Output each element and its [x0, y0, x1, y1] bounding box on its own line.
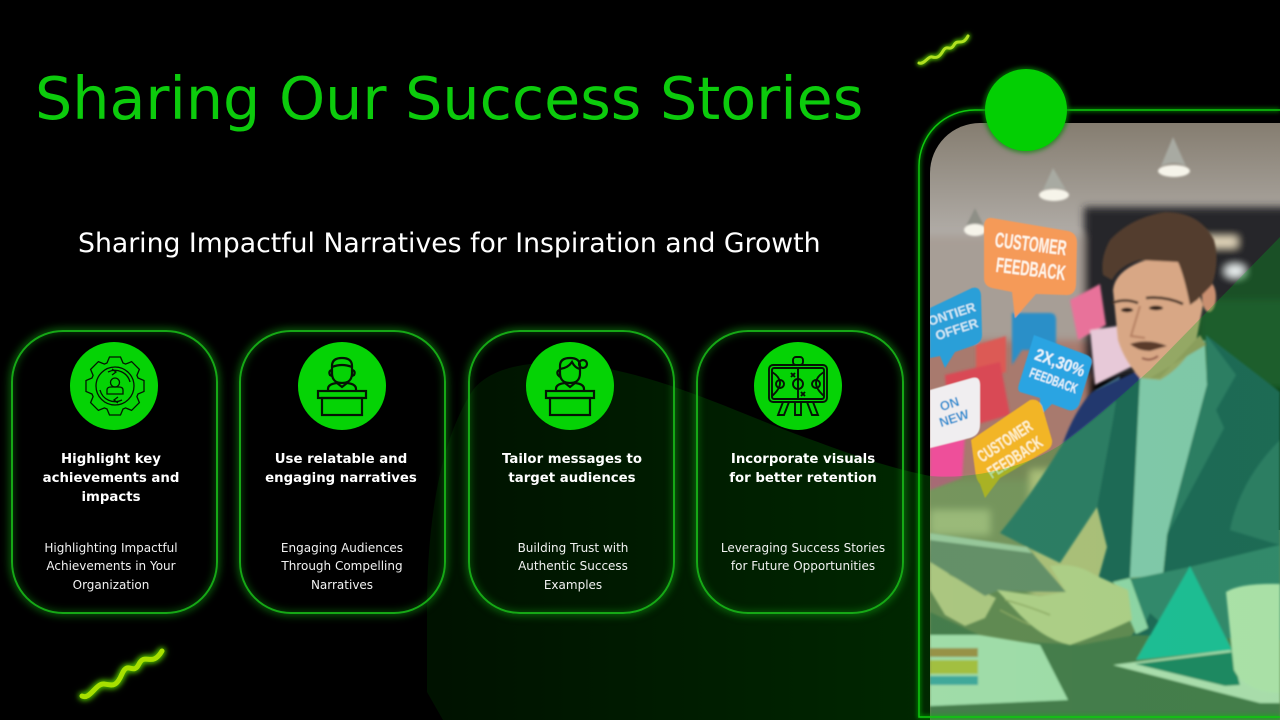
description: Examples	[544, 578, 602, 592]
man	[1000, 212, 1280, 640]
heading	[729, 452, 877, 486]
card outline	[696, 330, 904, 614]
heading: Highlight key	[61, 452, 161, 467]
description: Narratives	[311, 578, 373, 592]
icon: male speaker at podium	[298, 342, 386, 430]
panel: incorporate visuals	[689, 323, 911, 620]
panel: relatable narratives	[232, 323, 453, 621]
description: Highlighting Impactful	[44, 541, 178, 555]
feedback speech bubbles: FEEDBACK	[995, 254, 1067, 285]
description: Leveraging Success Stories	[721, 541, 885, 555]
accent green circle	[985, 69, 1067, 151]
top squiggle accent	[914, 30, 974, 69]
table with paper, triangle, tablet and cup	[930, 566, 1280, 720]
heading: engaging narratives	[265, 471, 417, 486]
description	[281, 541, 403, 592]
heading: Incorporate visuals	[731, 452, 875, 467]
description: Building Trust with	[518, 541, 628, 555]
card outline	[11, 330, 218, 614]
title: Sharing Our Success Stories	[35, 65, 863, 133]
feedback speech bubbles: CUSTOMER	[974, 417, 1036, 466]
heading	[502, 452, 642, 486]
heading: impacts	[81, 490, 141, 505]
ceiling lamps	[964, 137, 1190, 236]
hands holding tablet	[930, 533, 1132, 645]
description: Achievements in Your	[46, 559, 176, 573]
feedback speech bubbles: FEEDBACK	[1027, 364, 1080, 396]
card outline	[468, 330, 675, 614]
heading: target audiences	[508, 471, 636, 486]
icon: female speaker at podium	[526, 342, 614, 430]
feedback speech bubbles: FEEDBACK	[984, 432, 1047, 482]
heading	[43, 452, 179, 505]
photo: man reading customer feedback on a tablet	[930, 123, 1280, 720]
heading	[265, 452, 417, 486]
icon: tactics board on easel	[754, 342, 842, 430]
description: for Future Opportunities	[731, 559, 875, 573]
photo frame	[914, 105, 1280, 720]
bottom squiggle accent	[74, 644, 170, 705]
subtitle: Sharing Impactful Narratives for Inspiration and Growth	[78, 228, 821, 259]
description	[518, 541, 628, 592]
heading: Use relatable and	[275, 452, 407, 467]
description: Through Compelling	[281, 559, 403, 573]
description: Authentic Success	[518, 559, 628, 573]
feedback speech bubbles: 2X,30%	[1032, 345, 1088, 381]
feedback speech bubbles	[926, 218, 1135, 498]
panel: tailor messages	[461, 323, 682, 620]
card outline	[239, 330, 446, 614]
panel: highlight achievements	[4, 323, 225, 621]
feedback speech bubbles: NEW	[937, 406, 971, 430]
heading: achievements and	[43, 471, 179, 486]
description	[44, 541, 178, 592]
heading: Tailor messages to	[502, 452, 642, 467]
icon: gear with person	[70, 342, 158, 430]
heading: for better retention	[729, 471, 877, 486]
feedback speech bubbles: CUSTOMER	[994, 229, 1068, 260]
feedback speech bubbles: OFFER	[933, 315, 981, 343]
description: Engaging Audiences	[281, 541, 403, 555]
description	[721, 541, 885, 573]
feedback speech bubbles: ON	[938, 394, 961, 414]
description: Organization	[73, 578, 149, 592]
